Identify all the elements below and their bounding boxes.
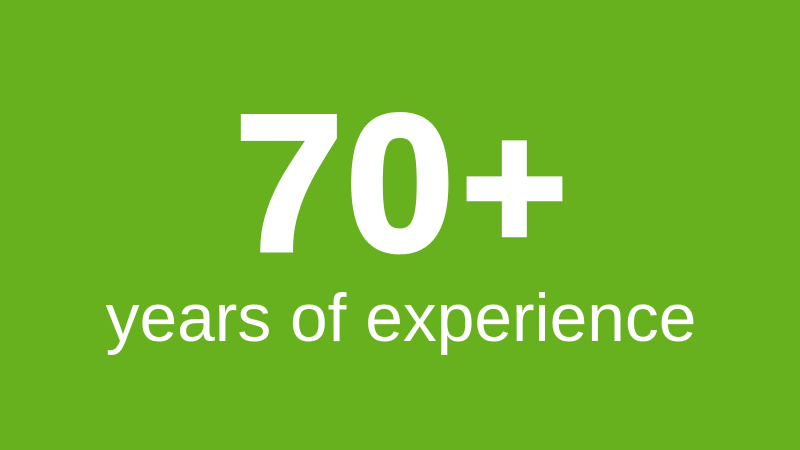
text: years of experience: years of experience	[106, 280, 696, 356]
heading: 70+: +	[462, 86, 567, 288]
heading: 70+: 0	[346, 75, 454, 292]
heading: 70+	[235, 75, 567, 292]
heading: 70+: 7	[235, 75, 343, 292]
